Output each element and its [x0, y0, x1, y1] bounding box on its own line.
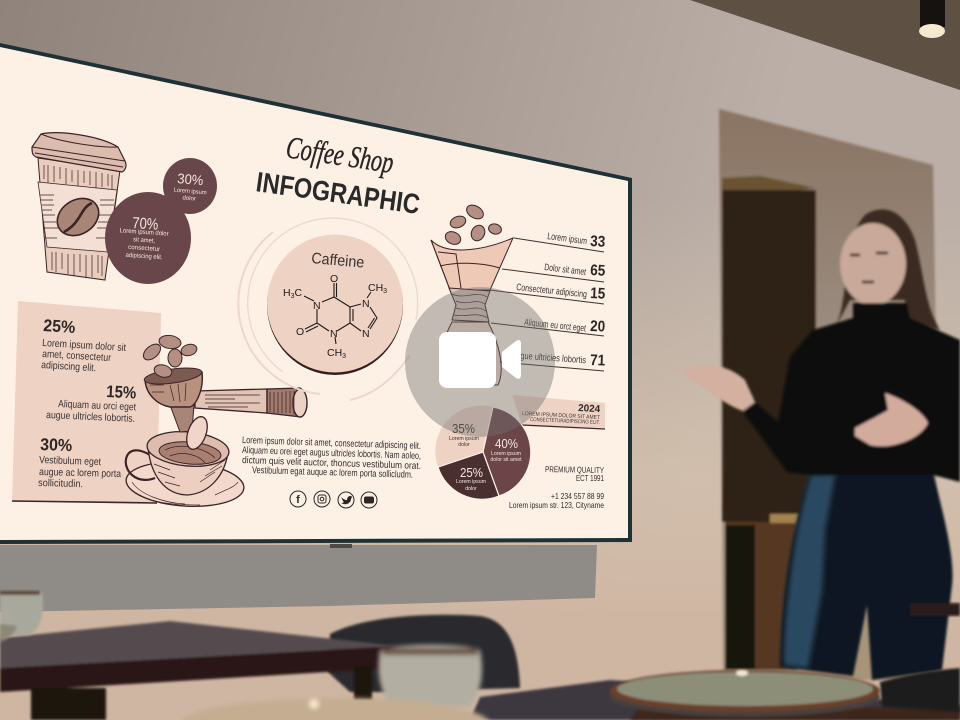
stat circle: 30% — [163, 158, 217, 214]
icon: facebook: f — [296, 494, 300, 506]
pie chart: 35% — [452, 421, 475, 436]
stat circle: 70% — [105, 192, 191, 284]
panel: percentages: 25% — [43, 316, 76, 337]
caffeine molecule — [304, 283, 377, 344]
paragraph: Vestibulum egat auque ac lorem porta sollicludm. — [252, 465, 413, 481]
caffeine circle: CH — [368, 282, 383, 294]
label: Caffeine — [311, 250, 365, 272]
face — [840, 223, 906, 305]
basket rim — [143, 365, 203, 387]
row: 65: 65 — [590, 262, 606, 280]
panel: percentages: Lorem ipsum dolor sit — [42, 338, 126, 354]
ceramic cup on left — [0, 591, 43, 636]
saucer — [125, 458, 245, 510]
slice 40% — [483, 407, 531, 496]
side shelf — [910, 603, 960, 616]
caffeine circle: H — [283, 287, 291, 299]
icon: instagram — [314, 491, 330, 507]
contact details: Lorem ipsum str. 123, Cityname — [509, 500, 604, 510]
row: 71: Augue ultricies lobortis — [511, 350, 587, 366]
row: 33: 33 — [590, 233, 606, 251]
icon: camera body — [439, 332, 496, 388]
pie chart: Lorem ipsum — [456, 479, 486, 485]
row: 15: Consectetur adipiscing — [516, 282, 587, 300]
row: 15: 15 — [590, 285, 606, 303]
chemex data list — [490, 231, 606, 371]
wooden collar — [449, 288, 490, 322]
trousers — [780, 473, 953, 680]
falling bean — [183, 414, 211, 452]
pie chart: Lorem ipsum — [491, 451, 521, 457]
chemex illustration — [431, 202, 513, 385]
caffeine circle: N — [362, 328, 370, 340]
pie chart: dolor — [458, 442, 470, 448]
panel: percentages: adipiscing elit. — [41, 360, 96, 374]
stat circle: 70%: Lorem ipsum dolor — [119, 227, 170, 238]
coffee swirl — [165, 446, 215, 463]
icon: youtube — [361, 492, 377, 508]
stat circle: 30%: dolor — [182, 195, 196, 203]
ceiling lamp — [919, 0, 945, 38]
eyes and mouth — [850, 253, 888, 282]
plate foreground — [180, 698, 490, 720]
caffeine circle: C — [294, 287, 302, 299]
panel: percentages: amet, consectetur — [42, 349, 112, 364]
paragraph: Aliquam eu orei eget augus ultricles lobortis. Nam aoleo, — [242, 445, 421, 462]
caffeine circle: N — [330, 328, 338, 340]
row: 65: Dolor sit amet — [544, 262, 587, 278]
saucer hatching — [132, 482, 238, 505]
alcove doorway — [719, 109, 936, 680]
stat circle: 70%: adipiscing elit. — [125, 252, 163, 261]
paragraph — [242, 435, 421, 481]
sleeve — [38, 182, 117, 252]
bean crease — [64, 203, 92, 232]
right hand — [855, 393, 928, 446]
person presenting — [682, 209, 960, 680]
panel: percentages: 30% — [40, 435, 73, 455]
wall mount — [330, 544, 352, 548]
panel: percentages: Aliquam au orci eget — [58, 399, 136, 413]
panel: percentages: Vestibulum eget — [39, 455, 101, 468]
panel: percentages: sollicitudin. — [38, 478, 83, 490]
takeaway cup illustration — [32, 133, 126, 280]
small bowl — [0, 624, 17, 642]
paragraph: dictum quis velit auctor, thoncus vestibulum orat. — [242, 455, 421, 472]
foreground wood edge — [630, 706, 960, 720]
social icons — [290, 491, 377, 508]
caffeine circle: O — [330, 273, 338, 285]
paragraph: Lorem ipsum dolor sit amet, consectetur adipiscing elit. — [242, 435, 421, 452]
panel: percentages: augue ultricles lobortis. — [46, 410, 135, 425]
portafilter and coffee cup illustration — [125, 334, 307, 510]
cup bowl — [148, 446, 228, 495]
cup hatching — [154, 460, 225, 486]
caffeine circle — [267, 234, 403, 375]
pie chart: dolor — [465, 486, 477, 492]
flask body — [440, 322, 501, 385]
collar grain — [452, 294, 488, 318]
left hand — [682, 365, 755, 411]
portafilter handle — [195, 389, 267, 413]
right dark chair — [880, 668, 960, 712]
caffeine rings — [238, 218, 418, 400]
caffeine circle: O — [296, 326, 304, 338]
panel: 2024: CONSECTETURADIPISCING ELIT. — [530, 417, 600, 426]
cup rim — [146, 428, 230, 470]
pie chart — [435, 405, 531, 499]
contact details: ECT 1991 — [576, 473, 604, 483]
panel: percentages — [12, 301, 161, 503]
portafilter spout — [170, 405, 194, 432]
pie chart: 40% — [495, 436, 518, 451]
foreground table — [470, 680, 960, 720]
stat circle: 30%: 30% — [177, 170, 204, 188]
hair — [836, 209, 940, 330]
grip end — [293, 389, 307, 417]
stat circle: 30%: Lorem ipsum — [173, 188, 207, 196]
contact details — [509, 464, 604, 510]
stat circle: 70%: 70% — [132, 215, 159, 234]
glass cup foreground — [378, 645, 482, 707]
video overlay badge — [405, 287, 555, 437]
display screen — [0, 47, 628, 540]
panel: percentages: 15% — [106, 382, 137, 403]
panel: percentages: augue ac lorem porta — [39, 467, 121, 480]
hatching — [40, 165, 114, 277]
display bezel — [0, 43, 632, 544]
panel: 2024 — [512, 395, 605, 429]
row: 71: 71 — [590, 352, 606, 370]
filter fold — [431, 240, 500, 290]
panel: 2024: LOREM IPSUM DOLOR SIT AMET — [522, 411, 601, 421]
trouser highlight — [784, 475, 835, 668]
caffeine circle: N — [313, 300, 321, 312]
slice 25% — [438, 452, 499, 499]
caffeine circle: CH — [327, 347, 342, 359]
filter cone — [431, 238, 513, 290]
stat circle: 70%: consectetur — [128, 244, 161, 253]
table leg left — [31, 688, 106, 720]
cup body — [38, 158, 120, 280]
cup handle — [126, 450, 155, 480]
table leg right — [354, 666, 372, 700]
basket hatching — [150, 383, 294, 414]
tabletop — [0, 621, 397, 668]
infographic content — [12, 129, 606, 510]
row: 20: 20 — [590, 318, 605, 336]
dining table — [0, 621, 397, 720]
beans above chemex — [443, 202, 503, 247]
caffeine circle: 3 — [383, 288, 387, 295]
handle grip — [267, 388, 307, 417]
plate right — [610, 670, 880, 717]
caffeine circle: N — [362, 298, 370, 310]
sweater — [743, 303, 960, 482]
caffeine circle: 3 — [291, 293, 295, 300]
pie chart: 25% — [460, 465, 483, 480]
caffeine circle: 3 — [342, 353, 346, 360]
row: 20: Aliquum eu orct eget — [524, 317, 587, 334]
icon: camera lens — [502, 340, 521, 379]
portafilter basket — [145, 370, 202, 407]
ceiling — [690, 0, 960, 90]
heading: INFOGRAPHIC: INFOGRAPHIC — [254, 166, 422, 220]
lid — [32, 133, 126, 172]
slice 35% — [435, 405, 493, 467]
coffee bean on sleeve — [50, 191, 106, 243]
table edge — [0, 646, 397, 692]
pie chart: Lorem ipsum — [449, 436, 479, 442]
pie chart: dolor sit amet — [490, 457, 522, 463]
stat circle: 70%: sit amet, — [133, 236, 156, 245]
panel: 2024: 2024 — [578, 403, 601, 415]
icon: twitter — [338, 492, 354, 508]
coffee surface — [158, 439, 222, 467]
lid rim lines — [32, 134, 125, 167]
row: 33: Lorem ipsum — [547, 231, 588, 247]
contact details: PREMIUM QUALITY — [545, 464, 604, 475]
heading: Coffee Shop script: Coffee Shop — [284, 129, 396, 180]
beans above portafilter — [140, 334, 198, 379]
back chair — [328, 615, 520, 692]
contact details: +1 234 557 88 99 — [551, 491, 604, 501]
